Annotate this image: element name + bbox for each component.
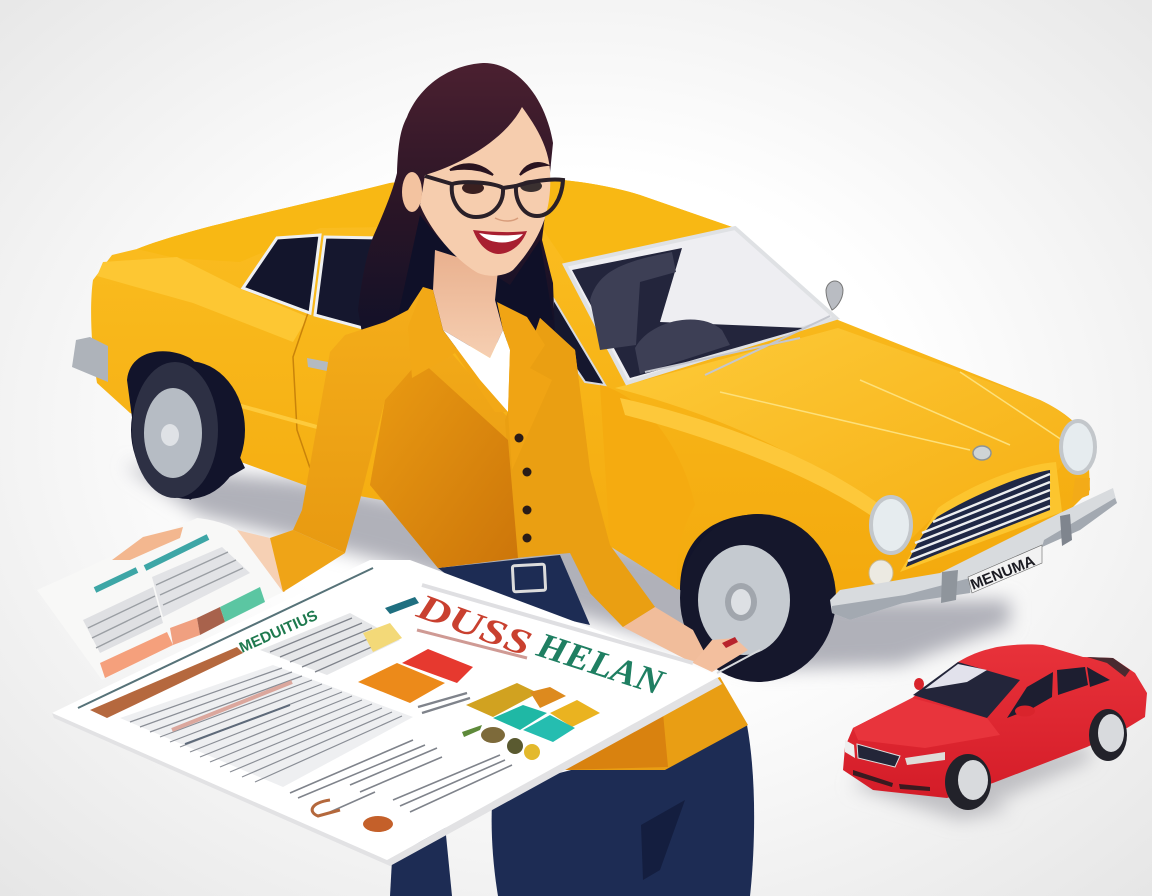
license plate: MENUMA (968, 552, 1038, 594)
document headline: DUSS (411, 585, 537, 664)
car body (91, 176, 1090, 620)
brown band (90, 647, 243, 718)
front bumper (830, 488, 1117, 620)
lower jacket (560, 677, 748, 770)
right lapel (497, 302, 552, 470)
rear bumper (72, 337, 108, 382)
belt buckle (512, 564, 546, 592)
side mirror (826, 281, 843, 310)
red car hood light (853, 698, 1000, 748)
hair (358, 63, 555, 350)
leg shadow (641, 800, 685, 880)
red car windshield (913, 662, 1020, 718)
main document: HELAN (532, 624, 671, 703)
document charts (358, 649, 600, 832)
logo (385, 597, 419, 614)
nose (495, 218, 518, 221)
jacket torso (293, 287, 655, 627)
red car mirrors (914, 678, 924, 690)
door handle (307, 358, 328, 371)
jacket left panel (370, 360, 518, 568)
headlights (871, 497, 911, 553)
document subhead: MEDUITIUS (237, 607, 320, 657)
text block right (260, 613, 400, 675)
yellow car (72, 176, 1117, 682)
trousers top (438, 555, 590, 625)
red car side windows (1007, 672, 1053, 718)
side windows (243, 235, 320, 313)
yellow box (363, 623, 402, 652)
glasses (425, 176, 563, 217)
rear wheel arch (127, 351, 245, 500)
headline underline (417, 630, 527, 658)
woman (237, 63, 754, 896)
eyebrows (450, 163, 547, 175)
fingers over document (693, 638, 748, 672)
back document (37, 518, 283, 680)
text block left (120, 665, 413, 787)
wrist (237, 530, 293, 592)
main document (52, 560, 760, 866)
eyes (462, 182, 484, 194)
red toy car (843, 644, 1147, 820)
brown U icon (312, 800, 340, 816)
forearm (623, 607, 712, 667)
side body lower (600, 385, 695, 590)
jacket right body (505, 318, 655, 627)
left lapel (408, 287, 508, 412)
front wheel arch (680, 514, 810, 650)
front wheel (680, 514, 836, 682)
red car rear spoiler (1087, 657, 1130, 677)
red car grille and lights (857, 744, 900, 767)
sleeve cuff (270, 530, 345, 592)
hood creases (720, 372, 1062, 450)
paper thickness (52, 677, 722, 866)
red car shadow (850, 745, 1090, 820)
shirt (443, 330, 510, 412)
hand on back document (112, 527, 183, 560)
red car body (843, 644, 1147, 798)
rear wheel (131, 361, 245, 499)
windshield (565, 228, 836, 383)
top rule (78, 568, 373, 708)
buttons (514, 434, 532, 542)
turn signal (1072, 478, 1090, 502)
car floor shadow (125, 465, 1010, 670)
bumper guards (941, 570, 958, 603)
bottom text block (290, 693, 512, 812)
ear (402, 172, 422, 212)
neck (433, 250, 503, 358)
belt highlight (97, 257, 308, 342)
door seam and crease (293, 313, 310, 468)
grille (906, 470, 1050, 567)
inner hair shadow (395, 215, 553, 330)
grille surround (900, 462, 1062, 572)
face (420, 107, 550, 276)
trousers legs (492, 725, 754, 896)
hood (615, 328, 1082, 545)
hood emblem (973, 446, 991, 460)
fender highlight (620, 398, 880, 515)
roof top band (137, 176, 735, 262)
smile (473, 230, 527, 254)
silver pen edge (717, 650, 760, 673)
red car wheels (945, 754, 991, 810)
paper sheet (52, 560, 720, 860)
